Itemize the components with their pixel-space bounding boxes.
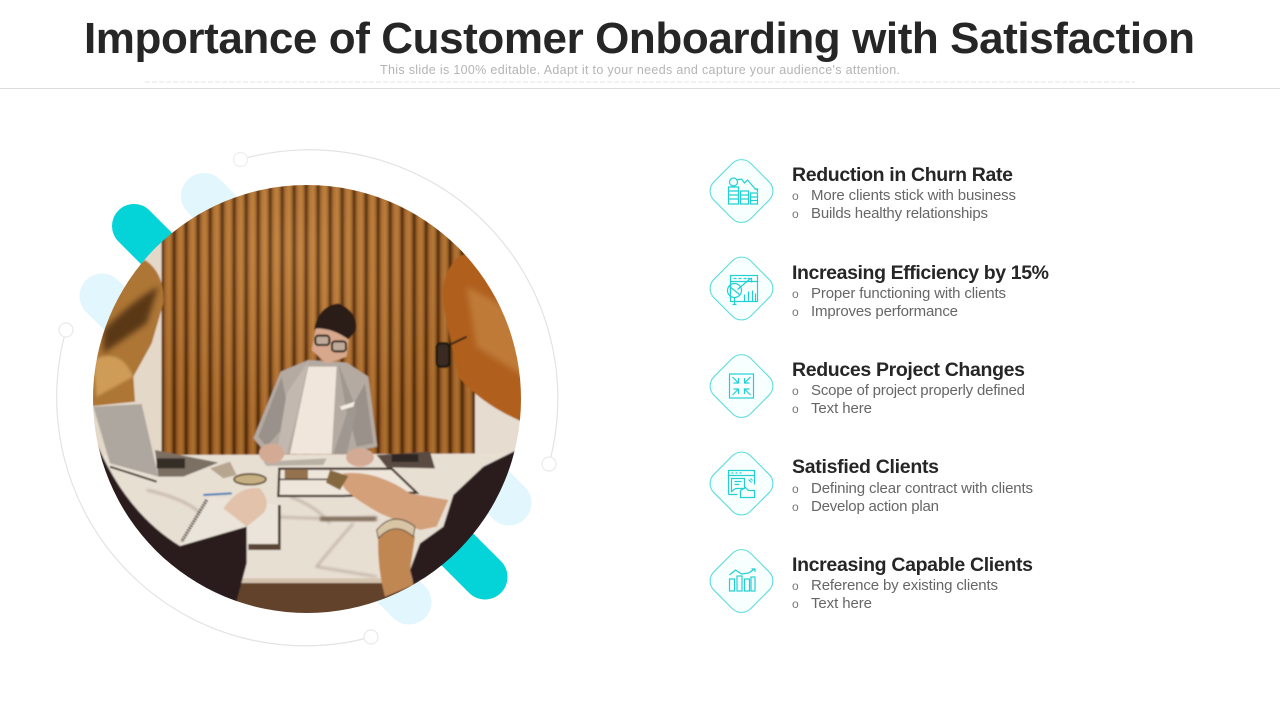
bullet list: Defining clear contract with clients: [811, 480, 1033, 497]
bullet list: [792, 187, 1016, 222]
wood slat wall: [162, 180, 475, 457]
bullet list: o: [792, 402, 799, 416]
heading: Satisfied Clients: [792, 456, 939, 478]
bullet list: [792, 577, 998, 612]
heading: Increasing Capable Clients: [792, 554, 1033, 576]
icon: coin stacks with falling trend: [705, 154, 778, 228]
item: Reduces Project Changes: [705, 349, 1025, 423]
icon: square with inward arrows: [705, 349, 778, 423]
item: Satisfied Clients: [705, 447, 1033, 520]
right woman: [326, 255, 530, 597]
bullet list: Develop action plan: [811, 498, 939, 515]
bullet list: o: [792, 189, 799, 203]
subtitle: This slide is 100% editable. Adapt it to your needs and capture your audience's attention.: [380, 63, 900, 77]
item: Increasing Efficiency by 15%: [705, 252, 1049, 325]
bullet list: [792, 382, 1025, 417]
bullet list: Scope of project properly defined: [811, 382, 1025, 399]
bullet list: o: [792, 500, 799, 514]
decorative diagonal pills: [102, 196, 509, 602]
bullet list: o: [792, 287, 799, 301]
bullet list: o: [792, 482, 799, 496]
bullet list: Proper functioning with clients: [811, 285, 1006, 302]
icon: browser window with hand: [705, 447, 778, 520]
left woman: [87, 260, 267, 613]
title: Importance of Customer Onboarding with Satisfaction: [84, 14, 1195, 63]
bullet list: Text here: [811, 400, 872, 417]
icon: dashboard with magnifier: [705, 252, 778, 325]
bullet list: Improves performance: [811, 303, 958, 320]
table documents: [180, 452, 435, 550]
bullet list: [792, 285, 1006, 320]
laptop: [93, 404, 218, 482]
bullet list: o: [792, 305, 799, 319]
bullet list: More clients stick with business: [811, 187, 1016, 204]
item: Increasing Capable Clients: [705, 544, 1033, 618]
bullet list: [792, 480, 1033, 515]
bullet list: o: [792, 207, 799, 221]
marble table: [90, 453, 530, 620]
bullet list: o: [792, 597, 799, 611]
bullet list: Reference by existing clients: [811, 577, 998, 594]
bullet list: o: [792, 384, 799, 398]
item: Reduction in Churn Rate: [705, 154, 1016, 228]
decorative ring with node circles: [57, 150, 558, 646]
heading: Reduces Project Changes: [792, 359, 1025, 381]
bullet list: o: [792, 579, 799, 593]
heading: Increasing Efficiency by 15%: [792, 262, 1049, 284]
heading: Reduction in Churn Rate: [792, 164, 1013, 186]
icon: bar chart with rising arrow: [705, 544, 778, 618]
bullet list: Builds healthy relationships: [811, 205, 988, 222]
bullet list: Text here: [811, 595, 872, 612]
man in grey blazer: [253, 303, 377, 467]
circular meeting photo illustration: [87, 177, 530, 620]
